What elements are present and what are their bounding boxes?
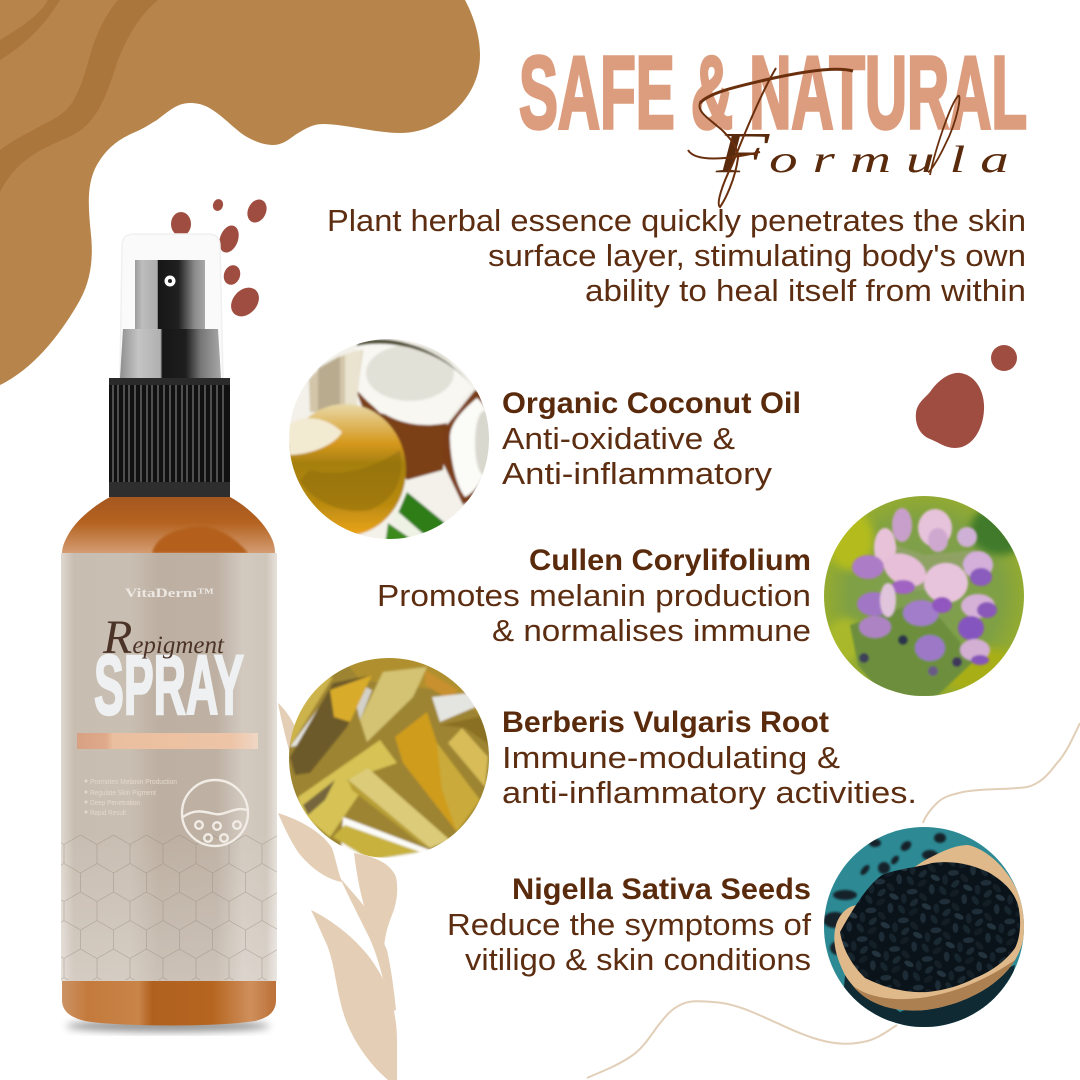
ingredient text: cullen corylifolium: Promotes melanin production — [377, 578, 811, 613]
bark piece — [290, 675, 372, 775]
product: spray bottle — [61, 234, 277, 1032]
background shape: top-left brown blob — [0, 0, 480, 385]
benefit list: Deep Penetration — [90, 800, 140, 807]
title — [519, 35, 1027, 207]
label — [61, 553, 277, 981]
coconut half white flesh — [358, 390, 446, 428]
intro paragraph — [327, 203, 1026, 308]
ingredient text: nigella sativa seeds: vitiligo & skin conditions — [465, 942, 811, 977]
green leaf — [397, 491, 445, 534]
peach bar — [77, 733, 258, 749]
benefit list — [84, 779, 177, 817]
photo: cullen corylifolium flower — [820, 490, 1030, 700]
decorative droplets near the bottle — [171, 196, 270, 322]
product name SPRAY: SPRAY — [94, 638, 244, 732]
ingredient text: coconut oil: Organic Coconut Oil — [502, 387, 801, 420]
pale stick center — [348, 768, 450, 848]
decorative blobs on the right — [916, 345, 1017, 448]
script word Formula: Formula — [715, 120, 1024, 185]
intro paragraph: surface layer, stimulating body's own — [488, 238, 1026, 273]
scattered seeds — [823, 833, 946, 955]
ingredient text: coconut oil — [502, 387, 801, 491]
photo: coconut oil — [284, 335, 495, 545]
white gap lower — [339, 816, 433, 858]
ingredient text: nigella sativa seeds: Reduce the symptoms of — [447, 907, 811, 942]
photo: berberis vulgaris root — [289, 658, 489, 858]
ribbed black cap — [109, 378, 230, 497]
skin icon — [182, 780, 248, 846]
stem and calyx — [849, 608, 973, 696]
ingredient text: nigella sativa seeds: Nigella Sativa Seeds — [512, 873, 811, 906]
nozzle hole — [164, 276, 176, 286]
decorative thin wavy line — [587, 723, 1080, 1078]
lower dark surface — [844, 965, 1015, 1027]
amber shoulder — [62, 497, 275, 553]
intro paragraph: Plant herbal essence quickly penetrates the skin — [327, 203, 1026, 238]
photo: nigella sativa seeds — [824, 827, 1024, 1027]
ochre slab — [394, 712, 457, 831]
wooden bowl — [834, 845, 1024, 1010]
petals — [892, 508, 912, 542]
lower yellow piece — [333, 825, 420, 860]
ingredient text: cullen corylifolium: Cullen Corylifolium — [529, 544, 811, 577]
brown coconut husk — [355, 388, 447, 480]
decorative beige leaves — [278, 703, 397, 1080]
oil flask neck — [309, 350, 363, 412]
benefit list: Regulate Skin Pigment — [90, 790, 156, 797]
stick far left — [290, 677, 333, 747]
ingredient text: nigella sativa seeds — [447, 873, 811, 977]
hexagon pattern — [61, 835, 277, 980]
ingredient text: berberis vulgaris root — [502, 706, 917, 810]
ingredient text: berberis vulgaris root: Immune-modulating & — [502, 740, 840, 775]
brand name: VitaDerm™ — [125, 585, 214, 600]
ingredient text: coconut oil: Anti-inflammatory — [502, 456, 773, 491]
benefit list: Promotes Melanin Production — [90, 779, 177, 786]
bottle shadow — [66, 1020, 270, 1032]
pump nozzle — [135, 260, 205, 330]
pale stick top — [360, 667, 427, 742]
intro paragraph: ability to heal itself from within — [585, 273, 1026, 308]
oil flask body — [284, 404, 406, 536]
striped block — [448, 728, 488, 787]
calligraphic swash — [688, 68, 959, 207]
ingredient text: berberis vulgaris root: anti-inflammatory activities. — [502, 775, 917, 810]
ingredient text: cullen corylifolium — [377, 544, 811, 648]
ingredient text: cullen corylifolium: & normalises immune — [492, 613, 811, 648]
benefit list: Rapid Result — [90, 810, 126, 817]
ingredient text: berberis vulgaris root: Berberis Vulgaris Root — [502, 706, 829, 739]
clear overcap — [120, 234, 223, 378]
seed mass — [840, 862, 1020, 992]
amber base — [62, 975, 276, 1026]
pump collar — [120, 329, 221, 378]
coconut right half — [441, 389, 485, 506]
pale stick left — [298, 740, 397, 837]
ingredient text: coconut oil: Anti-oxidative & — [502, 421, 735, 456]
script Repigment: Repigment — [102, 611, 225, 664]
